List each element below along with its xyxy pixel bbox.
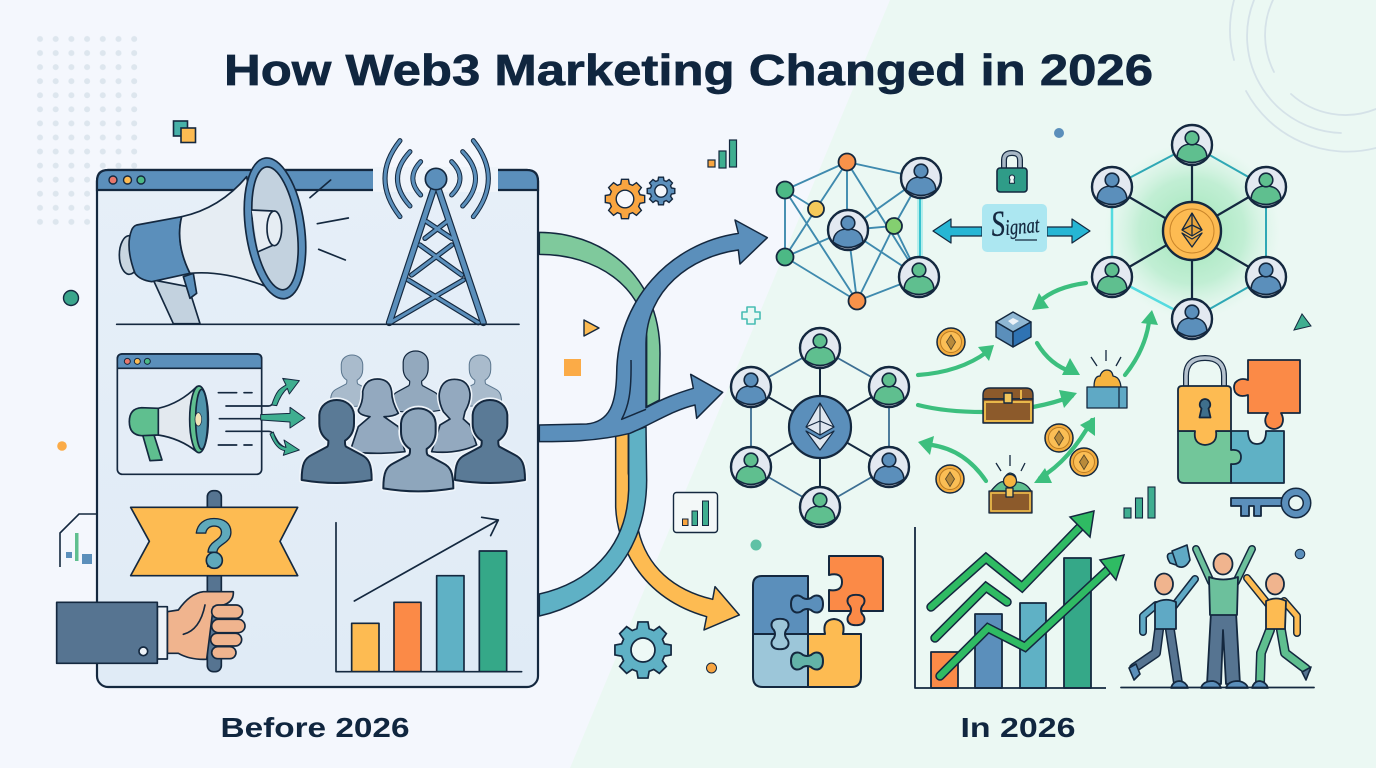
dot: teal [750, 540, 762, 550]
icon: overlapping squares [174, 121, 196, 142]
icon: open chest with gold [989, 455, 1032, 513]
icon: teal triangle [1294, 314, 1311, 330]
front row people [302, 400, 525, 491]
icon: cube [996, 312, 1031, 347]
icon: small chart card [674, 492, 718, 532]
dot: orange small [706, 663, 716, 673]
signature card [982, 204, 1047, 252]
signature text: Signat [989, 200, 1041, 244]
trophy [1167, 545, 1190, 567]
dot: orange [57, 441, 67, 451]
title: How Web3 Marketing Changed in 2026 [224, 46, 1153, 95]
icon: partial chart card left of panel [60, 514, 97, 567]
center person [1196, 549, 1252, 688]
bar chart: before 2026 growth [336, 517, 522, 672]
decorative dot grid [32, 32, 142, 230]
network: ethereum hub [731, 328, 909, 527]
arrow: left [933, 219, 982, 243]
fingers [211, 605, 245, 659]
yellow banner [131, 507, 298, 576]
question mark: ? [193, 506, 235, 582]
background: after side [570, 0, 1376, 768]
arrowheads [918, 293, 1158, 483]
icon: padlock [997, 153, 1027, 192]
icon: orange gear [605, 179, 645, 219]
orange puzzle piece [1234, 360, 1300, 429]
upper middle person [390, 351, 441, 412]
icon: large megaphone [119, 154, 348, 324]
teal puzzle piece [1231, 431, 1284, 483]
keyhole [1200, 399, 1210, 418]
icon: teal plus [742, 307, 760, 324]
blue flow inner crease [622, 360, 646, 419]
question mark dot [206, 552, 222, 568]
light blue piece [753, 634, 808, 687]
audience silhouettes [302, 351, 525, 491]
icon: yellow triangle [584, 320, 599, 336]
right person [1247, 574, 1311, 688]
icon: coins [937, 328, 965, 356]
left person [1129, 574, 1195, 688]
icon: key [1231, 492, 1307, 516]
middle row people [350, 379, 477, 453]
arrows: rising green trend lines [931, 511, 1124, 676]
icon: treasure chest [983, 388, 1033, 423]
arrows: green flows [918, 283, 1149, 481]
signature exchange [933, 200, 1090, 252]
icon: broadcast tower [117, 141, 519, 324]
bar chart: 2026 growth [915, 527, 1106, 688]
padlock shackle [1186, 358, 1224, 387]
decorative concentric arcs [1230, 0, 1376, 152]
panel: before 2026 browser window [97, 167, 538, 687]
blue piece [753, 576, 808, 634]
header gap behind tower [373, 167, 498, 192]
arrow: teal flow [539, 427, 647, 616]
back row people [330, 355, 502, 406]
green puzzle piece [1178, 431, 1241, 483]
arrow: green flow [539, 232, 660, 407]
padlock body [1178, 386, 1231, 445]
icon: blue gear [647, 177, 675, 205]
dot: blue top [1054, 128, 1064, 138]
green glow [1104, 143, 1280, 319]
icon: assembled puzzle [753, 556, 883, 687]
icon: open box with gold [1087, 350, 1127, 408]
yellow piece [808, 619, 861, 687]
icon: padlock with puzzle pieces [1178, 358, 1300, 483]
ground line [1121, 686, 1314, 688]
arrow: right [1047, 219, 1090, 243]
browser header bar [97, 170, 538, 190]
connector pieces [791, 596, 823, 612]
hand holding question sign [57, 491, 298, 672]
illustration: celebrating team [1121, 545, 1314, 688]
label: in 2026: In 2026 [960, 712, 1076, 743]
transition arrows between panels [539, 220, 767, 630]
suit sleeve [57, 602, 157, 663]
window control dots [109, 176, 145, 184]
small browser with green megaphone and arrows [117, 354, 305, 474]
orange piece [829, 556, 883, 611]
arrow: blue split flow [539, 220, 767, 442]
dot: blue right [1295, 549, 1305, 559]
token flow diagram [918, 283, 1158, 513]
icon: orange square [564, 359, 581, 376]
shirt cuff [157, 607, 167, 659]
sign post [207, 491, 221, 672]
sleeve button [139, 647, 148, 656]
arrow: yellow flow [616, 433, 739, 630]
dot: green [64, 290, 78, 306]
network: smart contract hub [1092, 125, 1286, 339]
hand [167, 592, 233, 659]
icon: teal gear [615, 622, 671, 678]
icon: small bars top [708, 140, 736, 168]
network: decentralized mesh [776, 154, 941, 310]
icon: small bars right [1124, 487, 1155, 518]
label: before 2026: Before 2026 [220, 712, 410, 743]
